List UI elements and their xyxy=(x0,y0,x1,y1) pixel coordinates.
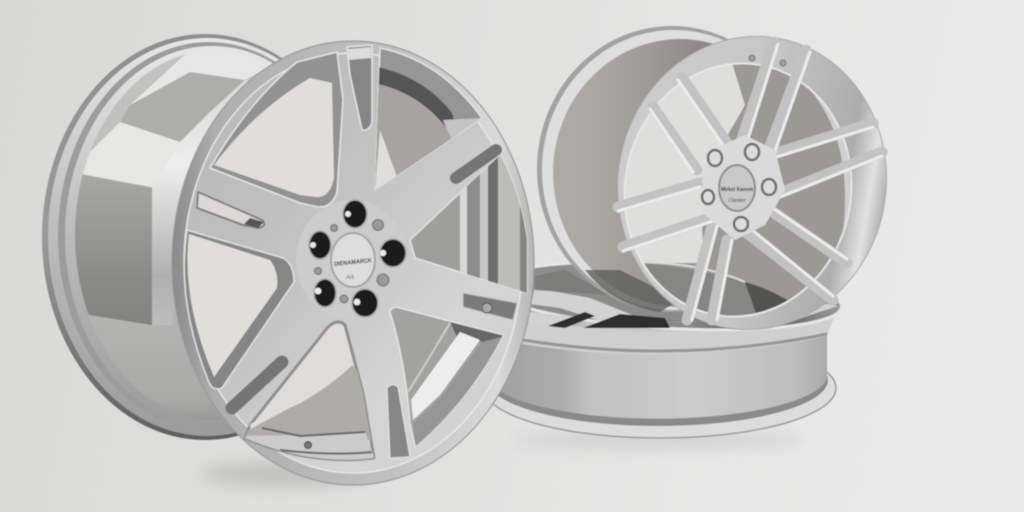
right wheel spoke-base bolts xyxy=(749,55,786,66)
wheel: upright back right xyxy=(536,26,888,330)
right wheel cap logo: Mirket Kanom xyxy=(721,187,754,193)
lying wheel top rim xyxy=(486,253,844,339)
left wheel rim outer edge xyxy=(172,41,534,485)
right wheel face disc xyxy=(595,15,909,351)
left wheel face disc xyxy=(172,41,534,485)
left wheel lug holes xyxy=(309,200,406,317)
right wheel back lip xyxy=(537,26,807,312)
window E: lower right xyxy=(390,307,505,447)
right wheel rim inner edge xyxy=(605,45,871,335)
left spoke slot xyxy=(197,192,264,228)
lying wheel twin bolt holes xyxy=(783,295,794,303)
lying wheel visible spokes xyxy=(520,288,838,328)
window C: upper right xyxy=(370,48,482,190)
left wheel lug bolts xyxy=(310,211,386,305)
lying wheel bottom lip xyxy=(484,338,836,438)
floor shadows xyxy=(200,436,810,486)
right wheel lip highlight xyxy=(542,30,806,310)
window F: bottom xyxy=(240,322,380,462)
window B: top slot xyxy=(347,45,372,130)
lower right spoke slot with valve xyxy=(463,293,517,320)
lying wheel upper dark recess xyxy=(535,270,610,295)
right wheel center cap xyxy=(719,165,755,211)
wheel: lying flat, bottom right xyxy=(484,253,844,438)
lying wheel top band xyxy=(488,310,836,355)
right wheel cap sub logo: Clanker xyxy=(728,198,746,204)
left wheel center cap xyxy=(331,233,375,287)
upper right spoke slot xyxy=(456,150,496,178)
lying wheel band dark line xyxy=(490,334,827,351)
right wheel barrel shadow xyxy=(585,270,680,312)
right wheel spoke highlights xyxy=(618,44,882,320)
left wheel rim band xyxy=(178,47,528,479)
lower left spoke slot xyxy=(232,362,282,408)
lying wheel dark recesses xyxy=(548,312,670,328)
left wheel small holes xyxy=(314,220,389,303)
left wheel barrel surface with reflections xyxy=(74,54,258,326)
window A: upper left xyxy=(210,52,343,207)
window G: left xyxy=(184,230,294,389)
lying wheel dark lip groove xyxy=(488,334,828,426)
right wheel see-through content xyxy=(626,64,850,316)
left wheel rim highlight xyxy=(184,53,522,473)
lying wheel barrel body xyxy=(488,300,827,419)
right wheel twin spokes xyxy=(618,42,882,320)
bottom spoke slot xyxy=(387,385,410,458)
right wheel barrel surface xyxy=(553,39,807,307)
left wheel cap logo: DIENAMARCK xyxy=(334,258,373,268)
right wheel lug holes xyxy=(702,144,776,231)
wheel: large front left xyxy=(42,34,534,485)
left wheel back lip xyxy=(42,34,368,440)
left wheel hub xyxy=(296,200,408,320)
window D: right xyxy=(409,154,528,294)
left wheel bottom bolt xyxy=(304,442,312,448)
right wheel hub xyxy=(702,135,785,240)
left wheel cap mark: AA xyxy=(345,275,354,281)
